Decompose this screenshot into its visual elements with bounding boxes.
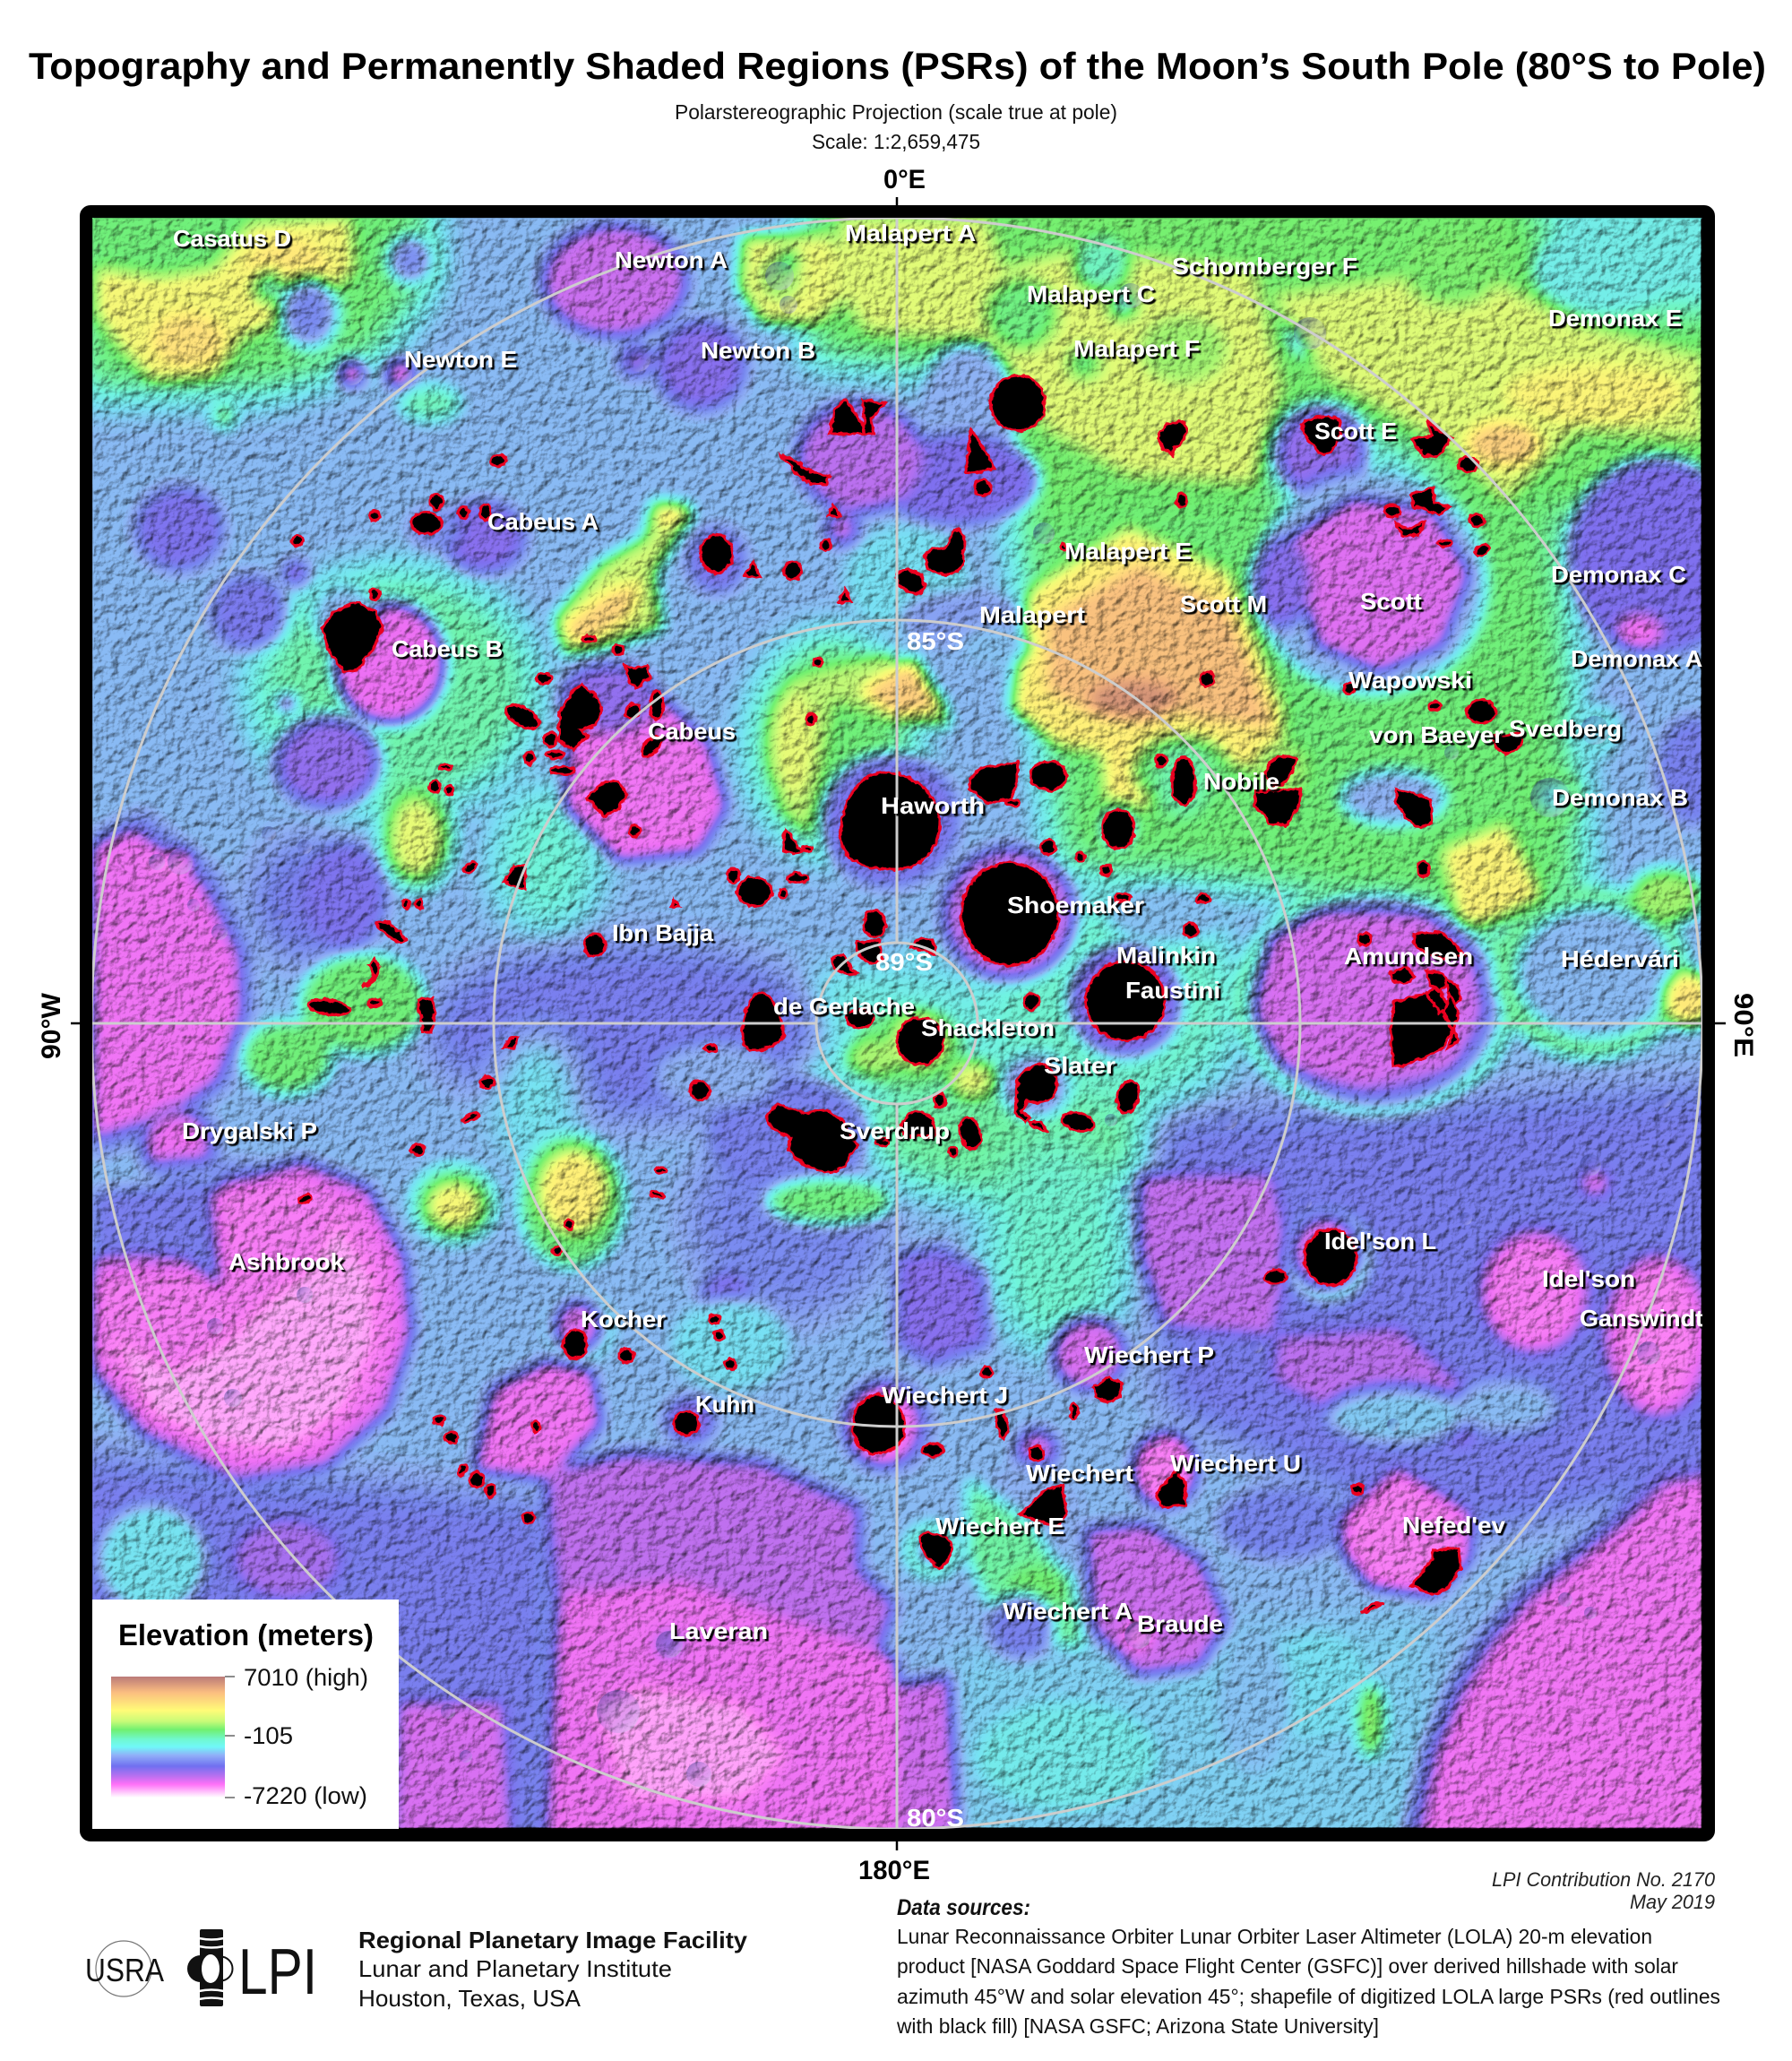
Wiechert group [1053, 1317, 1124, 1389]
map frame [86, 211, 1709, 1835]
crater name labels: Wiechert E [935, 1513, 1064, 1539]
crater name labels: Ashbrook [228, 1248, 345, 1275]
data sources text: azimuth 45°W and solar elevation 45°; shapefile of digitized LOLA large PSRs (red outlines [897, 1985, 1720, 2008]
crater name labels: Nefed'ev [1402, 1512, 1506, 1539]
crater name labels: Wiechert U [1170, 1450, 1301, 1477]
subtitle: projection and scale [675, 100, 1117, 153]
Demonax [1568, 457, 1747, 654]
crater name labels: Cabeus A [487, 508, 599, 535]
crater name labels: von Baeyer [1369, 721, 1503, 748]
Kocher and nearby [548, 1296, 613, 1360]
crater name labels: Braude [1137, 1610, 1223, 1637]
Cabeus B [334, 602, 445, 724]
legend: elevation colour ramp: 7010 (high) [244, 1664, 368, 1691]
massif west [556, 502, 690, 654]
institution text: Houston, Texas, USA [358, 1985, 582, 2012]
crater name labels: Malapert [979, 601, 1085, 628]
crater name labels: Cabeus [648, 718, 736, 745]
subtitle: projection and scale: Scale: 1:2,659,475 [812, 130, 980, 153]
crater name labels: Haworth [881, 792, 985, 819]
latitude labels: 85°S [907, 627, 964, 655]
crater name labels: Drygalski P [182, 1117, 317, 1144]
crater name labels: Demonax A [1571, 645, 1702, 672]
longitude labels and ticks: 0°E [883, 165, 926, 194]
longitude labels and ticks: 90°E [1728, 993, 1758, 1057]
institution text: Regional Planetary Image Facility [358, 1927, 748, 1953]
longitude labels and ticks: 90°W [37, 992, 66, 1059]
crater name labels: Malapert C [1027, 280, 1155, 307]
blue basin [918, 341, 1018, 484]
Malapert massif [1012, 529, 1281, 806]
east south craters [1138, 1174, 1290, 1335]
crater name labels: Wiechert J [882, 1382, 1008, 1409]
crater name labels: Wiechert [1026, 1460, 1133, 1487]
Shackleton cone [854, 1007, 965, 1090]
crater name labels: Newton A [615, 246, 728, 273]
crater name labels: Malinkin [1116, 942, 1216, 969]
crater name labels: Slater [1044, 1052, 1116, 1079]
left magenta crater [92, 811, 253, 1156]
crater name labels: Casatus D [173, 225, 291, 252]
crater name labels: Demonax B [1552, 784, 1688, 811]
crater name labels: Ganswindt [1580, 1305, 1703, 1332]
Idel'son L [1285, 1212, 1371, 1302]
legend: elevation colour ramp: -105 [244, 1722, 293, 1749]
crater name labels: Wiechert A [1003, 1598, 1133, 1625]
crater name labels: Hédervári [1561, 945, 1679, 972]
legend: elevation colour ramp: -7220 (low) [244, 1782, 367, 1809]
small craters overlay [149, 262, 1671, 1787]
crater name labels: Scott [1360, 588, 1422, 615]
Casatus massif [97, 218, 354, 381]
crater name labels: Malapert F [1073, 335, 1200, 362]
crater name labels: Laveran [669, 1617, 768, 1644]
permanently shaded regions: black fill with red outlines [292, 375, 1521, 1613]
Scott E crater [1262, 398, 1381, 516]
crater name labels: Scott E [1314, 418, 1397, 444]
Cabeus [564, 681, 726, 860]
crater name labels: Cabeus B [392, 635, 503, 662]
crater name labels: Sverdrup [840, 1117, 950, 1144]
data sources text [896, 1895, 1720, 2038]
logo: LPI: LPI [238, 1936, 317, 2008]
crater name labels: Wapowski [1348, 667, 1472, 694]
logo: LPI [187, 1929, 317, 2008]
south west violet [233, 1519, 340, 1600]
Amundsen [1236, 883, 1515, 1116]
crater name labels: Kocher [581, 1306, 666, 1332]
contribution note: May 2019 [1630, 1891, 1715, 1913]
contribution note: LPI Contribution No. 2170 [1492, 1868, 1716, 1891]
data sources text: with black fill) [NASA GSFC; Arizona State University] [896, 2014, 1379, 2038]
crater name labels: Ibn Bajja [612, 919, 714, 946]
logo: USRA: USRA [85, 1952, 164, 1988]
crater rings centre [822, 754, 958, 886]
crater name labels: Scott M [1180, 591, 1267, 617]
Newton craters [543, 225, 686, 336]
crater name labels: Kuhn [695, 1391, 754, 1418]
yellow hills [411, 1164, 497, 1243]
crater name labels: Amundsen [1344, 943, 1473, 970]
crater name labels: Schomberger F [1172, 253, 1357, 280]
Scott crater [1254, 470, 1487, 694]
crater name labels: Demonax E [1548, 305, 1682, 332]
legend: elevation colour ramp: Elevation (meters) [118, 1618, 374, 1651]
crater name labels: Demonax C [1551, 561, 1686, 588]
longitude labels and ticks: 180°E [858, 1856, 930, 1885]
institution text: Lunar and Planetary Institute [358, 1955, 672, 1982]
crater name labels: Svedberg [1509, 715, 1622, 742]
crater name labels: Nobile [1203, 768, 1279, 795]
Nefed'ev [1342, 1470, 1469, 1595]
latitude labels: 89°S [875, 948, 933, 976]
crater name labels: Malapert E [1064, 538, 1192, 565]
latitude labels [875, 627, 964, 1832]
crater name labels: Shackleton [921, 1014, 1055, 1041]
Drygalski P [140, 1105, 219, 1184]
crater name labels: Newton E [404, 346, 517, 373]
east ridge [1272, 269, 1705, 502]
institution text [358, 1927, 748, 2012]
data sources text: product [NASA Goddard Space Flight Center (GSFC)] over derived hillshade with solar [897, 1954, 1678, 1978]
crater name labels: Faustini [1125, 977, 1220, 1004]
crater name labels: Malapert A [845, 220, 976, 246]
logo: USRA [85, 1941, 164, 1996]
crater name labels: Idel'son [1542, 1265, 1635, 1292]
crater name labels: Shoemaker [1007, 892, 1144, 918]
map: elevation and hillshade terrain [92, 218, 1702, 1829]
crater name labels: Newton B [701, 337, 815, 364]
title: Topography and Permanently Shaded Regions (PSRs) of the Moon’s South Pole (80°S to Pole) [29, 45, 1766, 87]
contribution note [1492, 1868, 1716, 1913]
legend: elevation colour ramp [92, 1600, 399, 1829]
east lower plain [1402, 1452, 1756, 1846]
graticule: latitude circles and meridians [91, 218, 1702, 1829]
data sources text: Data sources: [897, 1895, 1030, 1920]
subtitle: projection and scale: Polarstereographic Projection (scale true at pole) [675, 100, 1117, 124]
crater name labels: Idel'son L [1324, 1228, 1436, 1255]
mini massif north of Haworth [780, 654, 950, 833]
data sources text: Lunar Reconnaissance Orbiter Lunar Orbiter Laser Altimeter (LOLA) 20-m elevation [897, 1925, 1652, 1948]
latitude labels: 80°S [907, 1804, 964, 1832]
crater name labels: Wiechert P [1084, 1341, 1214, 1368]
crater name labels [173, 220, 1703, 1644]
Hedervari [1492, 886, 1689, 1058]
crater name labels: de Gerlache [773, 993, 915, 1020]
Ashbrook [92, 1160, 412, 1479]
south purple plain [544, 1452, 896, 1658]
